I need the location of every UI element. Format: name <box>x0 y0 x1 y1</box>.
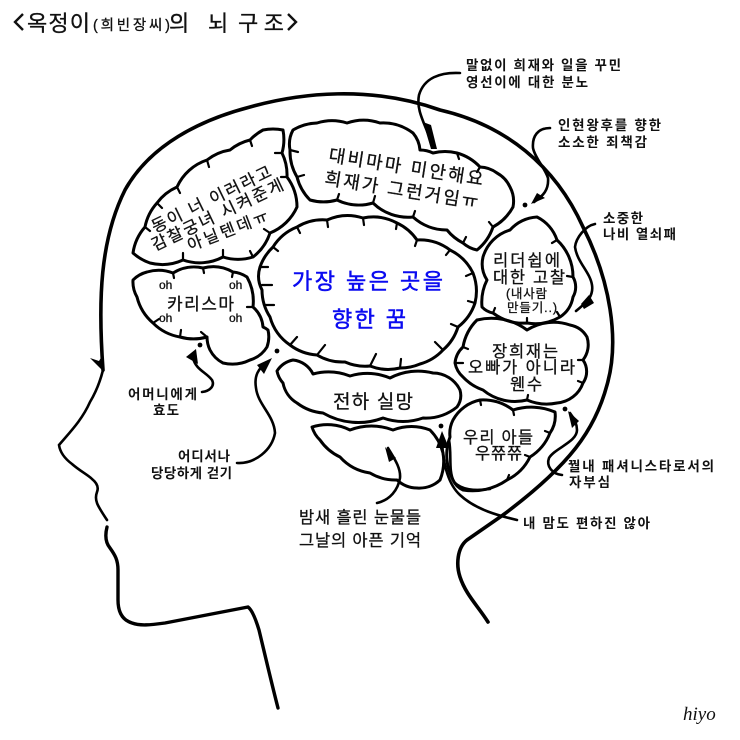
lobe: 장희재는 오빠가 아니라 웬수: 웬수 <box>510 375 542 394</box>
callout: 내 맘도 편하진 않아 <box>436 424 651 531</box>
lobe: 전하 실망: 전하 실망 <box>333 391 413 413</box>
lobe: 카리스마: oh <box>229 311 242 325</box>
signature: hiyo <box>683 704 716 725</box>
callout: 인현왕후를 향한: 인현왕후를 향한 <box>558 118 662 133</box>
title: 구조 <box>238 11 284 36</box>
title: 의 <box>169 11 189 36</box>
callout: 어디서나 당당하게 걷기: 당당하게 걷기 <box>151 466 232 481</box>
lobe: 대비마마 미안해요: 대비마마 미안해요 <box>327 145 485 189</box>
lobe: 가장 높은 곳을 향한 꿈: 가장 높은 곳을 <box>292 269 443 294</box>
lobe: 리더쉽에 대한 고찰: 리더쉽에 <box>493 251 560 270</box>
lobe: 밤새 흘린 눈물들 <box>299 425 444 550</box>
callout: 소중한 나비 열쇠패: 소중한 <box>603 211 644 226</box>
title: 옥정이 <box>27 11 90 36</box>
callout: 어디서나 당당하게 걷기: 어디서나 <box>178 449 231 464</box>
lobe: 리더쉽에 대한 고찰 <box>482 217 576 324</box>
lobe: 리더쉽에 대한 고찰: 만들기..) <box>507 301 557 315</box>
lobe: 장희재는 오빠가 아니라 웬수: 오빠가 아니라 <box>468 358 575 377</box>
lobe: 카리스마 <box>133 267 269 364</box>
callout: 말없이 희재와 일을 꾸민: 영선이에 대한 분노 <box>466 75 588 90</box>
face profile <box>59 356 278 708</box>
lobe: 우리 아들 우쮸쮸 <box>447 400 555 491</box>
title: (희빈장씨) <box>93 17 170 34</box>
title <box>15 11 296 36</box>
callout: 소중한 나비 열쇠패 <box>575 211 676 311</box>
lobe: 전하 실망 <box>277 360 461 423</box>
title: 뇌 <box>208 11 228 36</box>
lobe: 우리 아들 우쮸쮸: 우리 아들 <box>463 428 533 447</box>
lobe: 카리스마: oh <box>229 278 242 292</box>
callout: 꿜내 패셔니스타로서의 자부심: 자부심 <box>569 475 610 490</box>
callout: 내 맘도 편하진 않아: 내 맘도 편하진 않아 <box>523 516 651 531</box>
lobe: 카리스마: oh <box>159 311 172 325</box>
callout: 어머니에게 효도 <box>128 343 213 418</box>
callout: 말없이 희재와 일을 꾸민 <box>418 58 621 149</box>
lobe: 밤새 흘린 눈물들: 그날의 아픈 기억 <box>299 531 421 550</box>
lobe: 대비마마 미안해요 <box>289 120 514 250</box>
lobe: 가장 높은 곳을 향한 꿈 <box>259 216 476 369</box>
lobe: 리더쉽에 대한 고찰: (내사람 <box>506 287 547 301</box>
lobe: 밤새 흘린 눈물들: 밤새 흘린 눈물들 <box>299 508 421 527</box>
head outline <box>101 94 613 622</box>
callout: 어디서나 당당하게 걷기 <box>151 349 279 481</box>
lobe: 가장 높은 곳을 향한 꿈: 향한 꿈 <box>332 307 406 332</box>
callout: 꿜내 패셔니스타로서의 자부심: 꿜내 패셔니스타로서의 <box>568 459 714 474</box>
callout: 꿜내 패셔니스타로서의 자부심 <box>548 407 714 490</box>
lobe: 동이 너 이러라고 <box>133 129 297 265</box>
lobe: 우리 아들 우쮸쮸: 우쮸쮸 <box>475 445 522 463</box>
lobe: 동이 너 이러라고: 감찰궁녀 시켜준게 <box>149 175 287 255</box>
lobe: 장희재는 오빠가 아니라 웬수: 장희재는 <box>492 342 558 361</box>
lobe: 대비마마 미안해요: 희재가 그런거임ㅠ <box>323 168 480 212</box>
callout arrow: 밤새 흘린 눈물들 <box>377 447 400 503</box>
callout: 인현왕후를 향한: 소소한 죄책감 <box>558 135 648 150</box>
lobe: 카리스마: 카리스마 <box>167 295 234 314</box>
callout: 인현왕후를 향한 <box>523 118 662 207</box>
callout: 어머니에게 효도: 어머니에게 <box>128 387 197 402</box>
callout: 소중한 나비 열쇠패: 나비 열쇠패 <box>603 227 676 242</box>
lobe: 카리스마: oh <box>159 278 172 292</box>
lobe: 장희재는 오빠가 아니라 웬수 <box>455 318 588 404</box>
lobe: 동이 너 이러라고: 동이 너 이러라고 <box>148 162 274 237</box>
callout: 어머니에게 효도: 효도 <box>153 403 179 418</box>
callout: 말없이 희재와 일을 꾸민: 말없이 희재와 일을 꾸민 <box>466 58 621 73</box>
lobe: 리더쉽에 대한 고찰: 대한 고찰 <box>493 268 565 287</box>
lobe: 동이 너 이러라고: 아닐텐데ㅠ <box>185 207 271 255</box>
